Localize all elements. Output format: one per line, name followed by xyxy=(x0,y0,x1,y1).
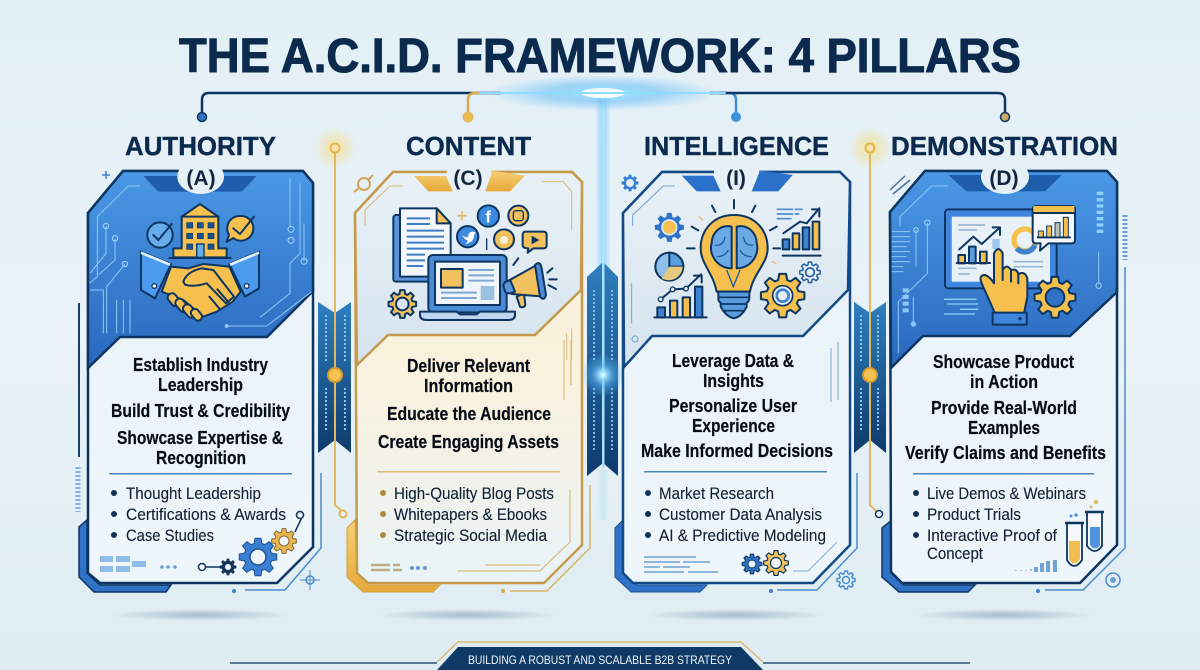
bullet list: demonstration: Interactive Proof of xyxy=(927,527,1057,545)
bullet list: intelligence xyxy=(645,485,826,545)
header: authority xyxy=(88,171,313,368)
outer frame accents: demonstration xyxy=(882,176,1125,593)
badge letter: D: (D) xyxy=(989,167,1019,190)
heading: demonstration: DEMONSTRATION xyxy=(891,131,1118,161)
bullet list: intelligence: Customer Data Analysis xyxy=(659,506,822,524)
badge letter: I: (I) xyxy=(726,167,746,190)
icon: test tubes xyxy=(1016,500,1104,572)
illustration: handshake and building xyxy=(89,159,312,333)
bullet list: content: High-Quality Blog Posts xyxy=(394,485,554,503)
header: intelligence xyxy=(623,172,850,367)
bullet list: content: Strategic Social Media xyxy=(394,527,548,545)
badge letter: C: (C) xyxy=(453,167,483,190)
bullet list: authority: Thought Leadership xyxy=(126,485,261,503)
heading: authority: AUTHORITY xyxy=(125,131,276,161)
key points: content: Deliver Relevant xyxy=(407,356,530,376)
bullet list: intelligence: AI & Predictive Modeling xyxy=(659,527,826,545)
bullet list: demonstration: Concept xyxy=(927,545,983,563)
key points: authority: Build Trust & Credibility xyxy=(111,401,290,421)
key points: intelligence xyxy=(641,351,833,461)
illustration: documents, social icons, laptop and megaphone xyxy=(365,167,572,360)
key points: content: Information xyxy=(424,376,513,396)
panel: authority xyxy=(78,131,321,593)
card body: demonstration xyxy=(890,171,1117,583)
decorative footer marks: content xyxy=(371,340,571,571)
outer frame accents: authority xyxy=(78,171,321,593)
heading: intelligence: INTELLIGENCE xyxy=(644,131,829,161)
connector bus with four drops xyxy=(198,93,1010,122)
key points: demonstration: Examples xyxy=(968,418,1040,438)
key points: content: Educate the Audience xyxy=(387,404,551,424)
footer tagline: BUILDING A ROBUST AND SCALABLE B2B STRATEGY xyxy=(468,653,732,667)
header: demonstration xyxy=(890,171,1117,368)
key points: authority: Leadership xyxy=(158,375,243,395)
connector ribbon: authority to content xyxy=(313,126,357,518)
card body: intelligence xyxy=(623,172,850,583)
key points: intelligence: Leverage Data & xyxy=(672,351,794,371)
key points: content: Create Engaging Assets xyxy=(378,432,559,452)
key points: demonstration xyxy=(905,352,1106,463)
outer frame accents: intelligence xyxy=(615,175,857,593)
card body: content xyxy=(355,172,582,583)
key points: intelligence: Make Informed Decisions xyxy=(641,441,833,461)
key points: demonstration: Provide Real-World xyxy=(931,398,1077,418)
panel: intelligence xyxy=(615,131,857,593)
key points: intelligence: Experience xyxy=(692,416,775,436)
key points: authority: Recognition xyxy=(156,448,246,468)
outer frame accents: content xyxy=(347,175,590,593)
icon: gears xyxy=(100,512,304,576)
connector ribbon: intelligence to demonstration xyxy=(848,126,892,518)
illustration: documents, social icons, laptop and megaphone: f xyxy=(485,208,491,227)
bullet list: authority xyxy=(111,485,286,545)
key points: demonstration: Showcase Product xyxy=(933,352,1074,372)
title: THE A.C.I.D. FRAMEWORK: 4 PILLARS xyxy=(179,30,1021,83)
key points: intelligence: Insights xyxy=(703,371,764,391)
illustration: dashboard with pointing hand xyxy=(892,159,1101,353)
key points: authority: Showcase Expertise & xyxy=(117,428,283,448)
key points: authority: Establish Industry xyxy=(133,355,268,375)
bullet list: demonstration: Product Trials xyxy=(927,506,1021,524)
bullet list: content: Whitepapers & Ebooks xyxy=(394,506,547,524)
heading: content: CONTENT xyxy=(406,131,531,161)
key points: demonstration: in Action xyxy=(970,372,1038,392)
card body: authority xyxy=(88,171,313,583)
bullet list: demonstration: Live Demos & Webinars xyxy=(927,485,1086,503)
key points: authority xyxy=(111,355,290,468)
key points: intelligence: Personalize User xyxy=(669,396,797,416)
footer band xyxy=(230,642,970,670)
bullet list: authority: Case Studies xyxy=(126,527,214,545)
bullet list: authority: Certifications & Awards xyxy=(126,506,286,524)
connector ribbon: content to intelligence xyxy=(581,262,625,476)
card shadows xyxy=(110,609,1093,621)
bullet list: content xyxy=(380,485,554,545)
header: content xyxy=(355,172,582,365)
bullet list: demonstration xyxy=(913,485,1086,563)
illustration: lightbulb brain and charts xyxy=(632,167,821,342)
central glowing spine xyxy=(488,75,718,520)
bullet list: intelligence: Market Research xyxy=(659,485,774,503)
key points: demonstration: Verify Claims and Benefits xyxy=(905,443,1106,463)
icon: footer gears and data lines xyxy=(644,342,838,575)
panel: demonstration xyxy=(882,131,1125,593)
badge letter: A: (A) xyxy=(186,167,216,190)
key points: content xyxy=(378,356,559,452)
panel: content xyxy=(347,131,590,593)
